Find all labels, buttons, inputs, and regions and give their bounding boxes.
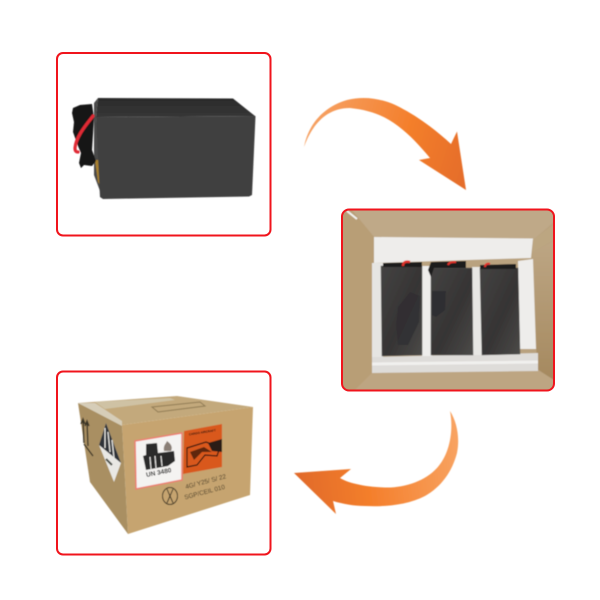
carton spec text line one: 4G/ Y25/ S/ 22 bbox=[185, 473, 227, 491]
hazard diamond stripe lines bbox=[105, 428, 114, 458]
right flap upper bbox=[533, 224, 554, 252]
panel frame: carton interior bbox=[342, 210, 554, 390]
bottom foam block bbox=[372, 353, 538, 373]
orange label background bbox=[183, 424, 222, 474]
arrow: battery to carton bbox=[304, 98, 466, 190]
carton interior photo bbox=[340, 207, 556, 393]
foam divider two bbox=[472, 267, 482, 355]
battery icon stripes bbox=[150, 456, 162, 469]
top foam block bbox=[374, 237, 533, 263]
shipping box bbox=[78, 396, 253, 534]
hazard symbol bbox=[106, 459, 112, 465]
foam divider one bbox=[422, 266, 432, 356]
left foam strip bbox=[372, 263, 383, 357]
hazard diamond label bbox=[99, 423, 121, 482]
box left bbox=[78, 403, 128, 534]
right foam strip bbox=[518, 259, 536, 349]
box front bbox=[122, 407, 253, 534]
battery top face bbox=[96, 98, 255, 117]
top stencil bbox=[152, 402, 205, 412]
battery middle bbox=[431, 268, 473, 355]
cargo label text: CARGO AIRCRAFT bbox=[189, 428, 216, 436]
UN mark bbox=[167, 489, 173, 503]
battery icon cells bbox=[143, 443, 175, 470]
hazard diamond stripes bbox=[99, 423, 121, 463]
battery pack bbox=[72, 98, 256, 199]
red wire left bbox=[403, 262, 410, 266]
battery right bbox=[480, 268, 520, 355]
panel frame: battery bbox=[57, 53, 270, 236]
arrow: carton to sealed box bbox=[294, 411, 458, 514]
UN number text: UN 3480 bbox=[146, 467, 172, 479]
UN 3480 label bbox=[135, 433, 182, 489]
UN circle bbox=[162, 488, 178, 504]
back flap bbox=[354, 210, 553, 238]
white tape sliver bbox=[347, 211, 357, 219]
carton spec text line two: SGP/CEIL 010 bbox=[184, 484, 226, 501]
black leads left bbox=[383, 262, 422, 267]
reflection on middle battery bbox=[432, 291, 446, 317]
bottom foam groove bbox=[372, 362, 538, 364]
black connector bbox=[72, 104, 96, 168]
panel: battery bbox=[57, 53, 270, 236]
panel: sealed shipping box bbox=[57, 372, 270, 554]
red wire bbox=[75, 116, 93, 152]
reflection on left battery bbox=[398, 296, 420, 344]
box top bbox=[78, 396, 253, 425]
amber cell wrap bbox=[95, 160, 103, 190]
battery side edge and tape bbox=[94, 98, 103, 199]
flame icon bbox=[164, 441, 172, 451]
bottom flap bbox=[354, 370, 554, 391]
cargo label second art bbox=[190, 447, 212, 460]
battery front face bbox=[96, 116, 256, 199]
carton base bbox=[372, 222, 553, 380]
right flap lower bbox=[535, 291, 553, 380]
clear tape bbox=[78, 403, 122, 426]
battery left bbox=[381, 266, 422, 356]
cargo label art bbox=[187, 442, 220, 467]
up arrows mark bbox=[81, 419, 93, 456]
panel frame: shipping box bbox=[57, 372, 270, 554]
black leads right bbox=[480, 264, 516, 269]
UN label background bbox=[135, 433, 182, 489]
cargo label black blot bbox=[208, 439, 222, 452]
tape on top bbox=[95, 398, 175, 409]
red wire middle bbox=[448, 262, 456, 265]
UN packaging symbol bbox=[162, 488, 178, 504]
panel: packed carton interior bbox=[340, 207, 556, 393]
orange cargo label bbox=[183, 424, 222, 474]
red wire right bbox=[485, 264, 490, 267]
left flap bbox=[342, 209, 374, 391]
black leads middle bbox=[428, 261, 466, 277]
